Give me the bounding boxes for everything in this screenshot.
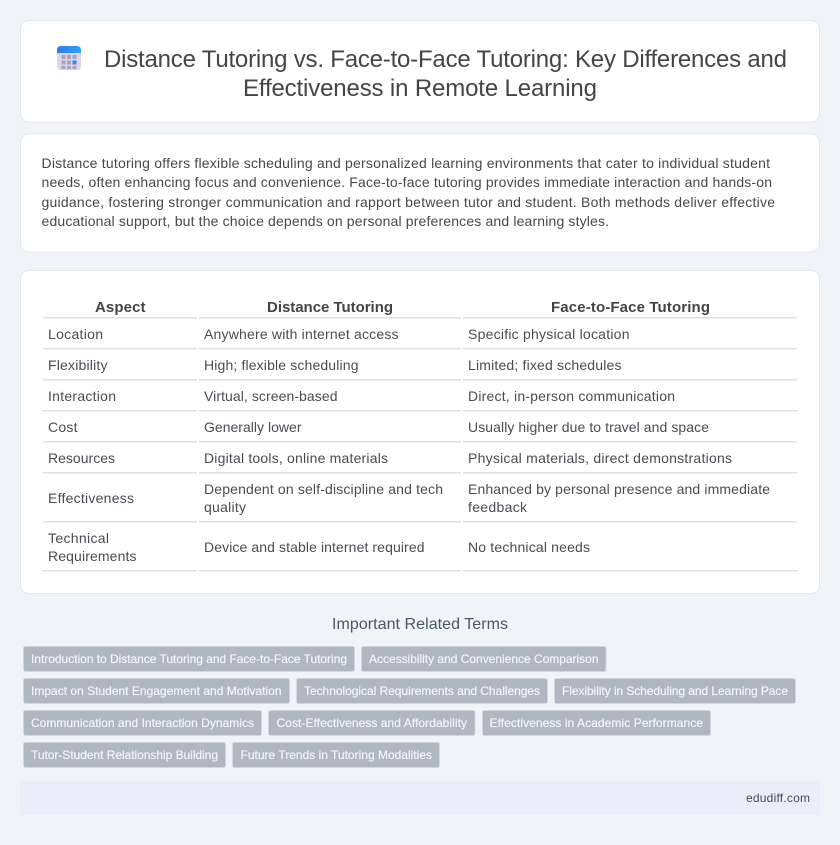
title <box>104 46 787 102</box>
row: technical requirements: Technical <box>48 530 109 546</box>
tag: accessibility: Accessibility and Convenience Comparison <box>369 652 598 666</box>
row: effectiveness: quality <box>204 499 246 515</box>
icon: calendar <box>57 46 81 70</box>
panel: introduction paragraph: needs, often enhancing focus and convenience. Face-to-face tutoring provides immediate interaction and hands-on <box>42 174 772 190</box>
related term tags <box>24 646 796 768</box>
tag: cost-effectiveness <box>268 710 475 736</box>
row: cost: Generally lower <box>204 419 302 435</box>
row: resources <box>43 450 797 474</box>
row: cost: Cost <box>48 419 78 435</box>
row: flexibility: Flexibility <box>48 357 108 373</box>
tag: introduction: Introduction to Distance Tutoring and Face-to-Face Tutoring <box>31 652 347 666</box>
panel: comparison table <box>20 270 820 594</box>
tag: academic performance: Effectiveness in Academic Performance <box>490 716 703 730</box>
panel: header <box>20 20 820 122</box>
tag: engagement <box>24 678 290 704</box>
tag: cost-effectiveness: Cost-Effectiveness and Affordability <box>276 716 467 730</box>
tag: flexibility <box>554 678 796 704</box>
row: flexibility: High; flexible scheduling <box>204 357 358 373</box>
row: flexibility <box>43 357 797 380</box>
row: technical requirements: Requirements <box>48 548 136 564</box>
tag: academic performance <box>482 710 710 736</box>
panel: introduction paragraph: Distance tutoring offers flexible scheduling and personalized learning environments that cater to individual student <box>42 155 770 171</box>
row: effectiveness: Enhanced by personal presence and immediate <box>468 481 770 497</box>
table header row: Aspect <box>95 299 146 316</box>
row: interaction: Interaction <box>48 388 116 404</box>
row: cost: Usually higher due to travel and space <box>468 419 709 435</box>
footer: edudiff.com <box>746 791 810 805</box>
row: location: Specific physical location <box>468 326 630 342</box>
row: location: Anywhere with internet access <box>204 326 398 342</box>
tag: flexibility: Flexibility in Scheduling and Learning Pace <box>562 684 788 698</box>
row: location: Location <box>48 326 103 342</box>
heading: important related terms: Important Related Terms <box>332 616 508 633</box>
table header row: Face-to-Face Tutoring <box>551 299 710 316</box>
row: effectiveness: Dependent on self-discipline and tech <box>204 481 443 497</box>
footer <box>20 781 820 815</box>
row: location <box>43 326 797 350</box>
row: effectiveness <box>43 481 797 522</box>
title: Distance Tutoring vs. Face-to-Face Tutoring: Key Differences and <box>104 46 787 73</box>
tag: introduction <box>24 646 354 672</box>
title: Effectiveness in Remote Learning <box>243 75 597 102</box>
panel: introduction paragraph: educational support, but the choice depends on personal preferences and learning styles. <box>42 213 609 229</box>
row: interaction: Virtual, screen-based <box>204 388 338 404</box>
tag: communication: Communication and Interaction Dynamics <box>31 716 254 730</box>
row: interaction: Direct, in-person communication <box>468 388 675 404</box>
tag: communication <box>24 710 262 736</box>
tag: accessibility <box>362 646 606 672</box>
row: resources: Physical materials, direct demonstrations <box>468 450 732 466</box>
row: effectiveness: feedback <box>468 499 528 515</box>
panel: introduction paragraph: guidance, fostering stronger communication and rapport between tutor and student. Both methods deliver effective <box>42 194 775 210</box>
row: technical requirements: Device and stable internet required <box>204 539 424 555</box>
row: interaction <box>43 388 797 412</box>
row: flexibility: Limited; fixed schedules <box>468 357 622 373</box>
tag: technological <box>296 678 548 704</box>
tag: future trends <box>232 742 440 768</box>
panel: introduction paragraph <box>20 134 820 252</box>
row: resources: Digital tools, online materials <box>204 450 388 466</box>
tag: technological: Technological Requirements and Challenges <box>304 684 540 698</box>
row: resources: Resources <box>48 450 115 466</box>
row: cost <box>43 419 797 442</box>
table header row <box>43 299 797 318</box>
row: technical requirements <box>43 530 797 572</box>
tag: future trends: Future Trends in Tutoring Modalities <box>240 748 432 762</box>
row: technical requirements: No technical needs <box>468 539 590 555</box>
tag: relationship building <box>24 742 226 768</box>
tag: relationship building: Tutor-Student Relationship Building <box>31 748 218 762</box>
tag: engagement: Impact on Student Engagement and Motivation <box>31 684 282 698</box>
row: effectiveness: Effectiveness <box>48 490 134 506</box>
table header row: Distance Tutoring <box>267 299 393 316</box>
